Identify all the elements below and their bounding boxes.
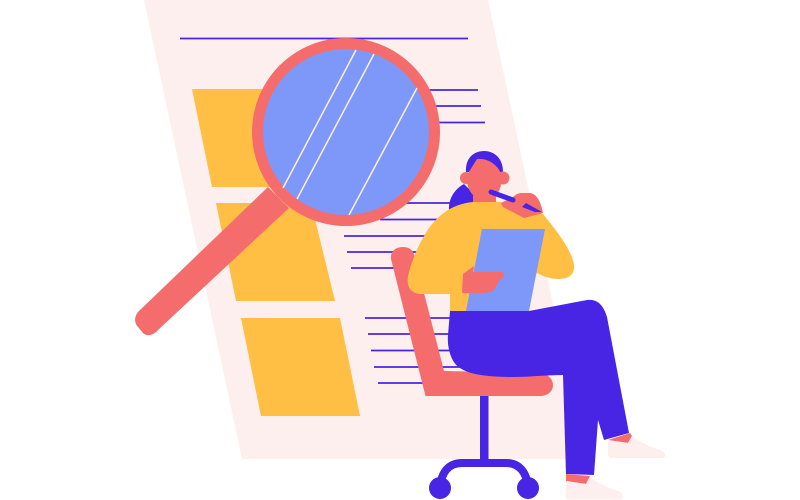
person [408, 151, 665, 500]
shoe left [566, 477, 623, 500]
icon: magnifying glass [135, 38, 440, 335]
chair caster right [517, 477, 539, 499]
lower hand [462, 266, 504, 293]
chair stem [480, 396, 488, 462]
chair back and seat [391, 247, 553, 396]
image block 2 [216, 203, 335, 301]
ear left [460, 172, 472, 184]
lens glare lines [283, 50, 417, 215]
magnifier handle [135, 187, 289, 335]
panel: document page [144, 0, 586, 459]
magnifier lens [263, 49, 429, 215]
chair caster left [429, 477, 451, 499]
hair [466, 151, 503, 172]
clipboard [466, 229, 545, 311]
text lines group 2 [344, 203, 460, 268]
ponytail [449, 184, 475, 212]
raised hand [501, 193, 543, 218]
text lines group 3 [365, 318, 460, 383]
shoe right [608, 436, 665, 458]
image block 1 [192, 89, 310, 187]
image block 3 [241, 318, 360, 416]
trousers [448, 300, 629, 475]
chair base [440, 463, 528, 488]
ear right [496, 172, 510, 184]
yellow sweater [408, 202, 574, 312]
face and neck [467, 159, 502, 204]
text lines group 1 [420, 90, 485, 122]
chair [391, 247, 553, 499]
document heading line [180, 38, 468, 40]
magnifier rim [252, 38, 440, 226]
sock right [608, 433, 632, 443]
sock left [566, 474, 590, 484]
pen [491, 192, 542, 212]
